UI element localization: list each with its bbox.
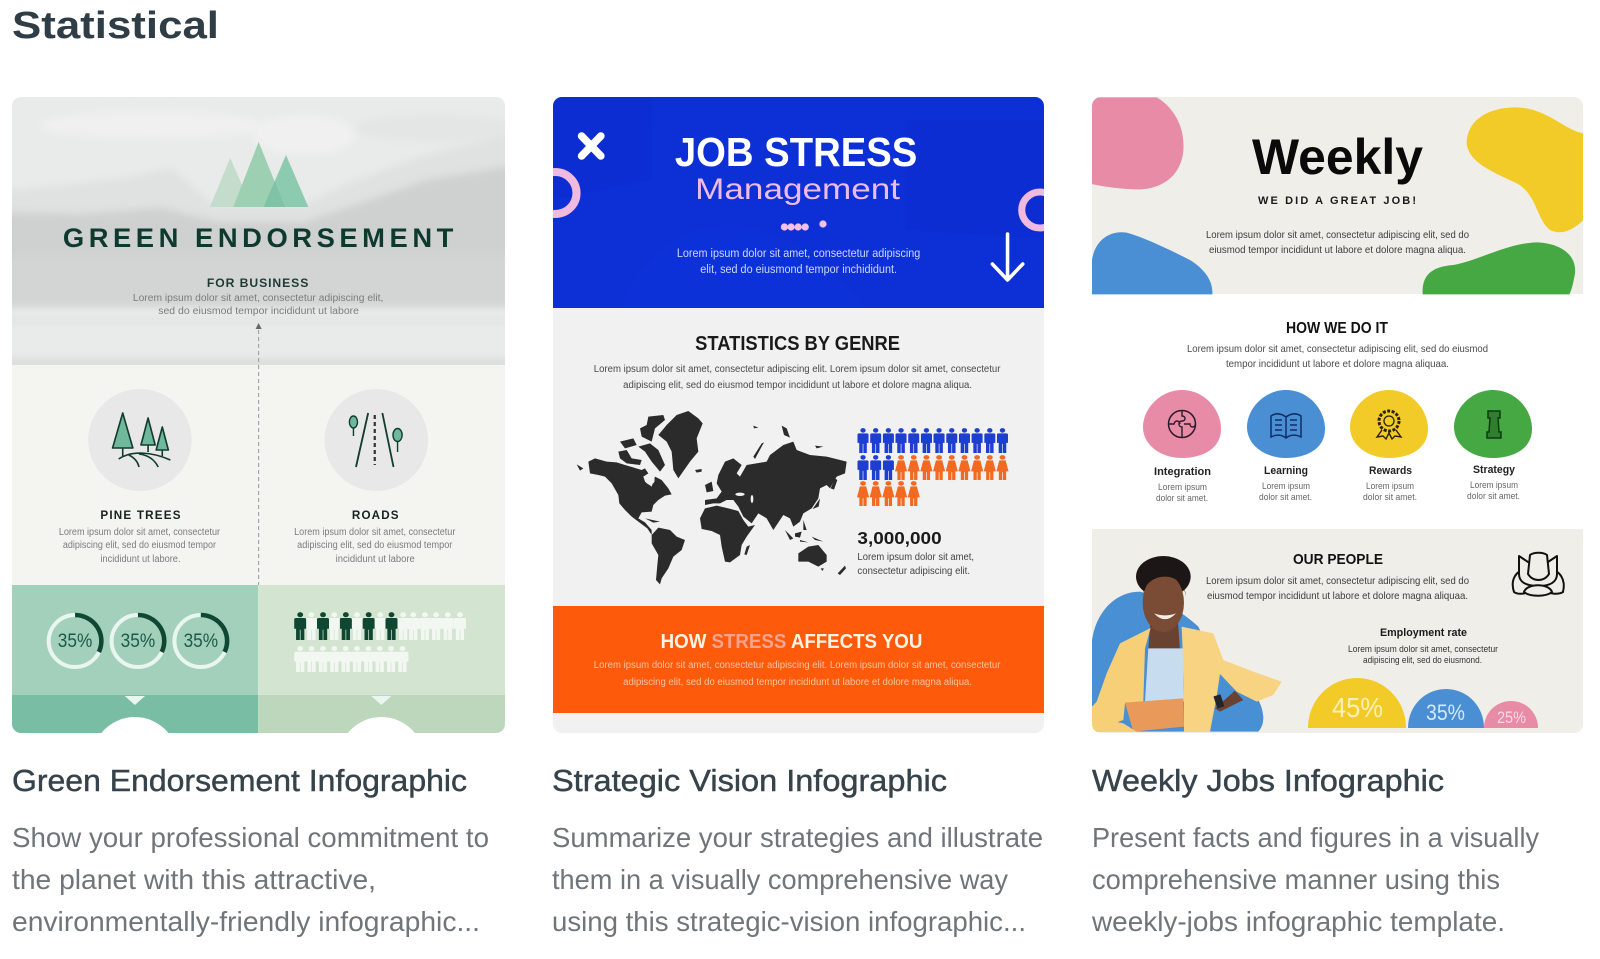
description: strategic vision — [552, 822, 1043, 937]
icon: pine trees — [88, 389, 192, 491]
ring chart 1: 35% — [58, 631, 92, 652]
panel: our people — [1092, 529, 1583, 733]
intro text: Lorem ipsum dolor sit amet, consectetur adipiscing elit, — [133, 292, 383, 304]
step: integration: Integration — [1154, 466, 1211, 478]
header text: Lorem ipsum dolor sit amet, consectetur adipiscing — [677, 246, 920, 260]
step: strategy: Lorem ipsum — [1470, 480, 1518, 491]
ring chart 3 — [174, 615, 227, 667]
description: green endorsement — [12, 822, 489, 937]
step: strategy: Strategy — [1473, 464, 1516, 476]
how we do it text — [1187, 343, 1488, 370]
chart: 25% — [1484, 701, 1538, 728]
pine trees text — [59, 510, 221, 565]
how we do it text: tempor incididunt ut labore et dolore magna aliquaa. — [1226, 358, 1449, 370]
our people text — [1206, 575, 1469, 602]
stat: 3,000,000 — [858, 532, 974, 576]
step: integration — [1154, 466, 1211, 504]
step: strategy — [1467, 464, 1520, 502]
employment rate text — [1348, 627, 1498, 666]
step: learning: Learning — [1264, 465, 1308, 477]
ring chart 3: 35% — [184, 631, 218, 652]
orange band text: Lorem ipsum dolor sit amet, consectetur adipiscing elit. Lorem ipsum dolor sit amet, consectetur — [594, 659, 1001, 671]
pine trees text: adipiscing elit, sed do eiusmod tempor — [63, 540, 217, 551]
header text — [1206, 229, 1469, 256]
panel: cream header — [1092, 97, 1583, 294]
our people heading: OUR PEOPLE — [1293, 551, 1383, 568]
chart: 45%: 45% — [1332, 692, 1383, 723]
job stress title: JOB STRESS — [675, 129, 917, 175]
stat: 3,000,000: Lorem ipsum dolor sit amet, — [857, 551, 974, 563]
description: weekly jobs: Present facts and figures in a visually — [1092, 822, 1539, 853]
panel: orange band — [550, 606, 1057, 713]
description: green endorsement: Show your professional commitment to — [12, 822, 489, 853]
icon: strategy rook — [1454, 390, 1532, 458]
statistics text: adipiscing elit, sed do eiusmod tempor incididunt ut labore et dolore magna aliqua. — [623, 379, 972, 391]
panel: beige body — [0, 365, 517, 585]
our people text: eiusmod tempor incididunt ut labore et dolore magna aliquaa. — [1207, 590, 1468, 602]
employment rate text: Employment rate — [1380, 627, 1467, 639]
roads text: adipiscing elit, sed do eiusmod tempor — [297, 540, 453, 551]
ring chart 1 — [49, 615, 101, 667]
roads text: ROADS — [352, 510, 399, 522]
header text — [677, 246, 920, 276]
description: strategic vision: them in a visually comprehensive way — [552, 864, 1008, 895]
chart: 25%: 25% — [1497, 708, 1526, 727]
statistics text: Lorem ipsum dolor sit amet, consectetur adipiscing elit. Lorem ipsum dolor sit amet, consectetur — [594, 363, 1001, 375]
step: rewards: Rewards — [1369, 465, 1412, 477]
panel: white body — [1092, 97, 1583, 733]
pine trees text: incididunt ut labore. — [100, 554, 181, 565]
employment rate text: adipiscing elit, sed do eiusmond. — [1363, 655, 1482, 666]
header text: eiusmod tempor incididunt ut labore et dolore magna aliqua. — [1209, 244, 1466, 256]
step: learning — [1259, 465, 1312, 503]
pictogram: blue and orange figures — [857, 428, 1009, 506]
green endorsement heading: GREEN ENDORSEMENT — [63, 222, 454, 253]
description: strategic vision: Summarize your strategies and illustrate — [552, 822, 1043, 853]
panel: green footer left — [0, 585, 258, 733]
mountains logo — [210, 142, 308, 207]
roads text — [294, 510, 456, 565]
heading: weekly jobs: Weekly Jobs Infographic — [1092, 763, 1444, 798]
world map — [577, 411, 847, 584]
dots — [781, 220, 827, 231]
photo header with forest — [12, 97, 505, 365]
weekly title: Weekly — [1252, 129, 1423, 185]
description: strategic vision: using this strategic-vision infographic... — [552, 906, 1026, 937]
section title: Statistical — [12, 5, 219, 47]
heading: strategic vision: Strategic Vision Infographic — [552, 763, 947, 798]
card: green endorsement infographic — [12, 97, 505, 733]
description: green endorsement: the planet with this attractive, — [12, 864, 376, 895]
our people text: Lorem ipsum dolor sit amet, consectetur adipiscing elit, sed do — [1206, 575, 1469, 587]
icon: roads — [325, 389, 428, 491]
heading: green endorsement: Green Endorsement Infographic — [12, 763, 467, 798]
icon: people group — [1513, 553, 1564, 596]
icon: learning book — [1247, 390, 1325, 458]
roads text: Lorem ipsum dolor sit amet, consectetur — [294, 527, 456, 538]
step: integration: dolor sit amet. — [1156, 493, 1208, 504]
icon: integration puzzle — [1143, 390, 1221, 458]
chart: 45% — [1308, 678, 1406, 728]
stat: 3,000,000: consectetur adipiscing elit. — [857, 565, 970, 577]
ring chart 2 — [112, 615, 164, 667]
icon: rewards medal — [1350, 390, 1428, 458]
step: rewards: Lorem ipsum — [1366, 481, 1414, 492]
stat: 3,000,000: 3,000,000 — [857, 528, 942, 548]
intro text — [134, 294, 382, 316]
notches and pointers — [102, 696, 415, 733]
decorative pink rings — [534, 172, 1058, 228]
header text: elit, sed do eiusmond tempor inchididunt. — [700, 262, 897, 276]
step: integration: Lorem ipsum — [1158, 482, 1207, 493]
orange band text — [594, 659, 1001, 688]
tagline: WE DID A GREAT JOB! — [1258, 195, 1416, 207]
pine trees text: Lorem ipsum dolor sit amet, consectetur — [59, 527, 221, 538]
people chart — [294, 612, 466, 672]
step: strategy: dolor sit amet. — [1467, 491, 1520, 502]
how we do it heading: HOW WE DO IT — [1286, 320, 1388, 337]
ring chart 2: 35% — [121, 631, 155, 652]
how stress affects you heading: HOW STRESS AFFECTS YOU — [661, 631, 922, 653]
description: weekly jobs: comprehensive manner using this — [1092, 864, 1500, 895]
card: weekly jobs infographic — [1092, 97, 1583, 733]
employment rate text: Lorem ipsum dolor sit amet, consectetur — [1348, 644, 1498, 655]
intro text: sed do eiusmod tempor incididunt ut labore — [158, 305, 359, 317]
icon: close cross — [582, 136, 601, 156]
description: green endorsement: environmentally-friendly infographic... — [12, 906, 480, 937]
portrait of woman — [1092, 556, 1282, 732]
chart: 35%: 35% — [1426, 700, 1465, 725]
orange band text: adipiscing elit, sed do eiusmod tempor incididunt ut labore et dolore magna aliqua. — [623, 676, 972, 688]
description: weekly jobs: weekly-jobs infographic template. — [1091, 906, 1505, 937]
management subtitle: Management — [695, 173, 901, 206]
panel: blue header — [550, 97, 1057, 308]
panel: green footer right — [258, 585, 517, 733]
icon: down arrow — [992, 234, 1023, 280]
step: learning: dolor sit amet. — [1259, 492, 1312, 503]
statistics text — [594, 363, 1001, 391]
step: rewards — [1363, 465, 1417, 503]
for business subheading: FOR BUSINESS — [207, 276, 308, 290]
decorative blobs — [1092, 97, 1583, 294]
pine trees text: PINE TREES — [100, 510, 181, 522]
dashed arrow — [256, 323, 262, 585]
panel: gray body — [553, 308, 1044, 733]
header text: Lorem ipsum dolor sit amet, consectetur adipiscing elit, sed do — [1206, 229, 1469, 241]
roads text: incididunt ut labore — [336, 554, 415, 565]
statistics heading: STATISTICS BY GENRE — [695, 333, 900, 355]
card: strategic vision infographic — [534, 97, 1058, 733]
chart: 35% — [1408, 689, 1484, 728]
how we do it text: Lorem ipsum dolor sit amet, consectetur adipiscing elit, sed do eiusmod — [1187, 343, 1488, 355]
description: weekly jobs — [1091, 822, 1539, 937]
step: rewards: dolor sit amet. — [1363, 492, 1417, 503]
step: learning: Lorem ipsum — [1262, 481, 1310, 492]
